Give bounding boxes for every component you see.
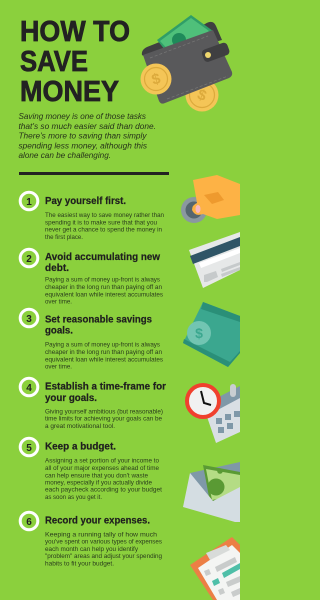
step 5 body: all of your major expenses ahead of time [45,465,159,472]
icon: clock and calendar [187,384,240,443]
step 2 number badge [20,249,38,267]
step 6 number badge [20,512,38,530]
intro paragraph: Saving money is one of those tasks [18,112,146,121]
step 2 heading [45,252,160,274]
icon: teal wallet [183,302,240,367]
step 5 [20,438,162,501]
intro paragraph: alone can be challenging. [18,151,111,160]
infographic canvas [18,15,240,600]
step 6 body: you've spent on various types of expenses [45,538,163,546]
step 3 body: over time. [45,364,72,370]
step 6 heading: Record your expenses. [45,516,150,526]
step 6 number badge: 6 [26,517,32,528]
step 5 body: can help ensure that you don't waste [45,472,148,479]
step 3 number badge [20,309,38,327]
step 4 [20,378,166,430]
step 3 [20,309,164,370]
step 5 body: each paycheck according to your budget [45,487,162,494]
step 3 body: Paying a sum of money up-front is always [45,342,161,348]
step 2 body: equivalent loan while interest accumulates [45,291,164,298]
step 3 heading [45,314,152,336]
step 2 [20,249,164,306]
step 6 body: Keeping a running tally of how much [45,531,157,538]
step 2 body: cheaper in the long run than paying off an [45,284,162,291]
step 4 body: Giving yourself ambitious (but reasonable) [45,408,163,415]
step 5 body: Assigning a set portion of your income to [45,457,159,464]
step 4 body: a great motivational tool. [45,423,115,430]
step 1 heading: Pay yourself first. [45,196,126,207]
step 6 body: each month can help you identify [45,546,139,553]
step 3 number badge: 3 [26,314,32,325]
step 4 number badge [20,378,38,396]
step 6 body: "problem" areas and adjust your spending [45,553,162,560]
title [20,16,130,108]
intro paragraph [18,112,156,160]
intro paragraph: spending less money, although this [18,142,147,150]
step 5 number badge: 5 [26,443,32,454]
step 1 [20,192,164,241]
step 1 number badge: 1 [26,197,32,208]
step 3 body: cheaper in the long run than paying off an [45,349,162,356]
step 1 body: spending it is to make sure that that you [45,219,157,226]
step 3 body: equivalent loan while interest accumulates [45,356,164,363]
title: SAVE [20,46,88,78]
step 4 body [45,408,163,430]
step 2 body: over time. [45,298,72,306]
step 5 number badge [20,438,38,456]
icon: hand holding coin [181,175,240,223]
step 5 body [45,457,162,501]
step 3 heading: goals. [45,326,73,336]
step 2 heading: Avoid accumulating new [45,252,160,263]
title: MONEY [20,76,119,108]
step 1 body [45,212,164,241]
step 1 number badge [20,192,38,210]
intro paragraph: that's so much easier said than done. [18,122,156,131]
title: HOW TO [20,16,130,48]
step 4 body: time limits for achieving your goals can be [45,416,162,423]
icon: teal wallet: $ [195,325,203,341]
icon: clipboard [190,537,240,600]
step 5 body: money, especially if you actually divide [45,480,152,486]
icon: envelope with cash [183,462,240,522]
step 4 heading: your goals. [45,393,97,404]
step 1 body: the first place. [45,234,83,241]
icon: credit card [189,232,240,288]
step 2 body [45,276,164,306]
step 1 body: The easiest way to save money rather than [45,212,164,219]
step 6 body: habits to fit your budget. [45,560,114,568]
step 3 body [45,342,164,370]
icon: wallet with money and coins: $ [195,86,209,105]
step 4 heading: Establish a time-frame for [45,382,166,392]
step 1 body: never get a chance to spend the money in [45,227,162,234]
step 6 [20,512,163,568]
step 2 number badge: 2 [26,254,32,265]
step 5 heading: Keep a budget. [45,442,116,452]
step 4 number badge: 4 [26,383,32,394]
icon: wallet with money and coins: $ [150,70,163,89]
step 2 heading: debt. [45,263,69,274]
intro paragraph: There's more to saving than simply [18,132,148,140]
step 6 body [45,531,163,568]
step 5 body: as soon as you get it. [45,494,102,501]
divider rule [19,172,169,175]
icon: wallet with money and coins [140,15,232,112]
step 2 body: Paying a sum of money up-front is always [45,276,161,284]
step 4 heading [45,382,166,404]
step 3 heading: Set reasonable savings [45,314,152,326]
